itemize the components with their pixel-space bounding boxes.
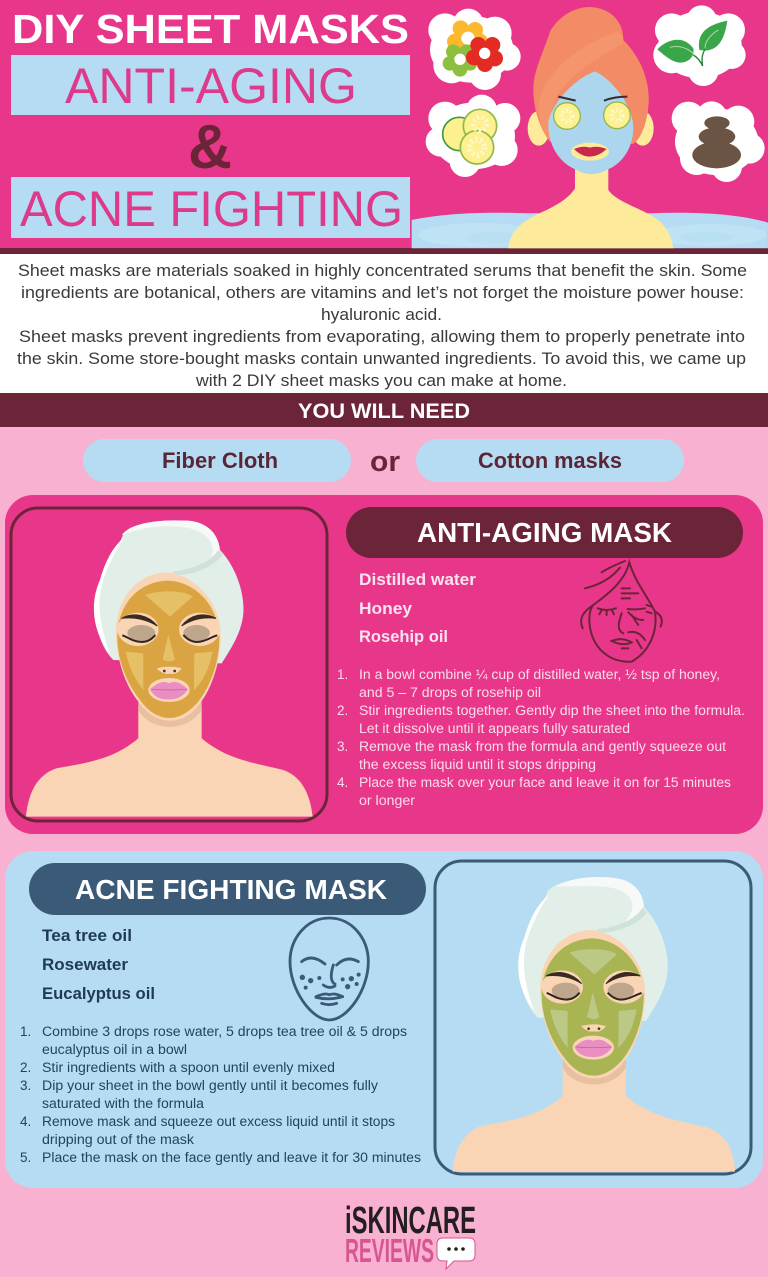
option pill: cotton masks xyxy=(416,439,684,482)
steps: acne fighting: 1. xyxy=(20,1024,31,1039)
you will need band: YOU WILL NEED xyxy=(298,400,470,423)
intro text xyxy=(0,254,768,393)
ingredients list: acne fighting: Tea tree oil xyxy=(42,926,132,945)
steps: anti-aging: or longer xyxy=(359,793,416,808)
woman xyxy=(508,7,673,248)
intro text: hyaluronic acid. xyxy=(321,305,442,324)
steps: anti-aging: 2. xyxy=(337,703,348,718)
steps: acne fighting xyxy=(20,1024,421,1165)
logo: iSkincare Reviews: REVIEWS xyxy=(345,1232,434,1269)
steps: anti-aging: and 5 – 7 drops of rosehip oil xyxy=(359,685,541,700)
heading pill: acne fighting mask xyxy=(29,863,426,915)
header panel xyxy=(0,0,768,254)
ingredients list: acne fighting: Eucalyptus oil xyxy=(42,984,155,1003)
ingredients list: anti-aging: Rosehip oil xyxy=(359,627,448,646)
steps: acne fighting: Combine 3 drops rose water, 5 drops tea tree oil & 5 drops xyxy=(42,1024,407,1039)
option pill: cotton masks: Cotton masks xyxy=(478,448,622,473)
steps: anti-aging xyxy=(337,667,745,808)
title box: anti-aging: ANTI-AGING xyxy=(65,58,357,114)
steps: acne fighting: Remove mask and squeeze out excess liquid until it stops xyxy=(42,1114,395,1129)
cloud: leaves xyxy=(653,5,746,86)
heading pill: acne fighting mask: ACNE FIGHTING MASK xyxy=(75,874,387,905)
ingredients list: anti-aging: Distilled water xyxy=(359,570,476,589)
intro text: Sheet masks are materials soaked in highly concentrated serums that benefit the skin. Some xyxy=(18,261,747,280)
illustration: woman with green mask xyxy=(435,861,751,1174)
you will need band xyxy=(0,393,768,427)
cloud: flowers xyxy=(428,9,521,90)
illustration: woman with gold mask xyxy=(11,508,327,821)
option pill: fiber cloth xyxy=(83,439,351,482)
steps: anti-aging: 1. xyxy=(337,667,348,682)
steps: acne fighting: Stir ingredients with a spoon until evenly mixed xyxy=(42,1060,335,1075)
icon: wrinkled face xyxy=(581,561,662,662)
steps: acne fighting: saturated with the formula xyxy=(42,1096,204,1111)
ingredients list: anti-aging: Honey xyxy=(359,599,413,618)
steps: acne fighting: 3. xyxy=(20,1078,31,1093)
or label: or xyxy=(370,446,400,478)
cloud: cucumbers xyxy=(426,95,520,177)
steps: acne fighting: eucalyptus oil in a bowl xyxy=(42,1042,187,1057)
icon: speech bubble xyxy=(437,1238,475,1269)
steps: anti-aging: In a bowl combine ¼ cup of distilled water, ½ tsp of honey, xyxy=(359,667,720,682)
steps: acne fighting: dripping out of the mask xyxy=(42,1132,194,1147)
intro text: with 2 DIY sheet masks you can make at home. xyxy=(195,371,567,390)
title: DIY sheet masks: DIY SHEET MASKS xyxy=(12,6,409,52)
ingredients list: anti-aging xyxy=(359,570,476,646)
intro text: Sheet masks prevent ingredients from evaporating, allowing them to properly penetrate into xyxy=(19,327,745,346)
heading pill: anti-aging mask: ANTI-AGING MASK xyxy=(417,517,672,548)
steps: acne fighting: 5. xyxy=(20,1150,31,1165)
steps: anti-aging: Let it dissolve until it appears fully saturated xyxy=(359,721,630,736)
steps: acne fighting: 4. xyxy=(20,1114,31,1129)
ingredients list: acne fighting xyxy=(42,926,155,1003)
steps: anti-aging: 4. xyxy=(337,775,348,790)
intro text: the skin. Some store-bought masks contain unwanted ingredients. To avoid this, we came up xyxy=(17,349,746,368)
steps: acne fighting: Place the mask on the face gently and leave it for 30 minutes xyxy=(42,1150,421,1165)
title box: acne fighting: ACNE FIGHTING xyxy=(20,181,403,237)
water xyxy=(412,213,768,248)
intro text: ingredients are botanical, others are vitamins and let’s not forget the moisture power house: xyxy=(21,283,744,302)
heading pill: anti-aging mask xyxy=(346,507,743,558)
illustration: spa woman with ingredient clouds xyxy=(412,5,768,248)
steps: anti-aging: Remove the mask from the formula and gently squeeze out xyxy=(359,739,726,754)
panel: anti-aging mask xyxy=(5,495,763,834)
ampersand: & xyxy=(188,113,232,182)
steps: anti-aging: Place the mask over your face and leave it on for 15 minutes xyxy=(359,775,731,790)
icon: face with acne xyxy=(290,918,368,1020)
steps: acne fighting: Dip your sheet in the bowl gently until it becomes fully xyxy=(42,1078,378,1093)
steps: anti-aging: Stir ingredients together. Gently dip the sheet into the formula. xyxy=(359,703,745,718)
option pill: fiber cloth: Fiber Cloth xyxy=(162,448,278,473)
title box: anti-aging xyxy=(11,55,410,115)
steps: anti-aging: the excess liquid until it stops dripping xyxy=(359,757,596,772)
logo: iSkincare Reviews: iSKINCARE xyxy=(345,1200,476,1242)
steps: acne fighting: 2. xyxy=(20,1060,31,1075)
cloud: stones xyxy=(672,101,765,182)
steps: anti-aging: 3. xyxy=(337,739,348,754)
logo: iSkincare Reviews xyxy=(345,1200,476,1269)
ingredients list: acne fighting: Rosewater xyxy=(42,955,128,974)
panel: acne fighting mask xyxy=(5,851,763,1188)
